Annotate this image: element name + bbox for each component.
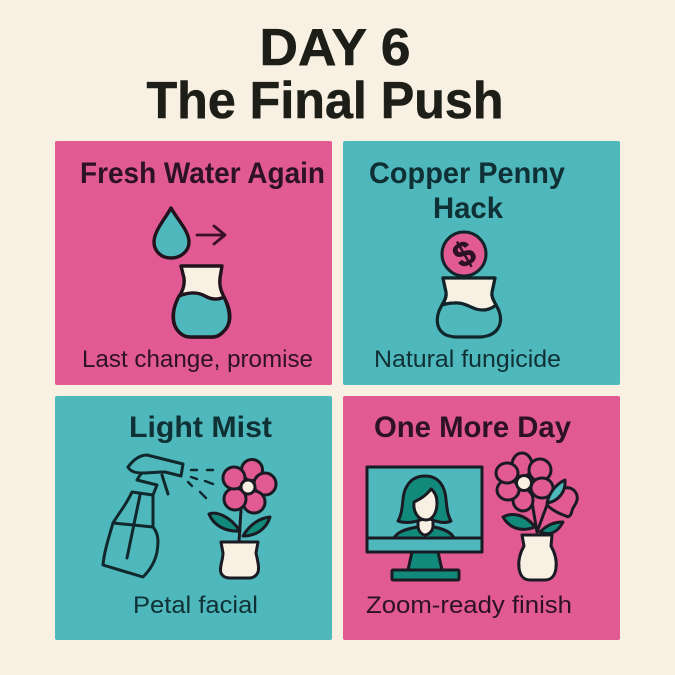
- icon: penny: $: [446, 233, 482, 276]
- panel: one more day: [343, 396, 620, 640]
- heading: copper penny hack: [369, 157, 566, 225]
- heading: light mist: Light Mist: [129, 411, 272, 444]
- icon: water drop: [154, 208, 189, 258]
- heading: copper penny hack: Copper Penny: [369, 157, 566, 190]
- icon: person on screen: [394, 476, 454, 538]
- icon: flower vase: [496, 453, 577, 580]
- caption: zoom-ready finish: Zoom-ready finish: [366, 592, 572, 619]
- caption: petal facial: Petal facial: [133, 592, 258, 619]
- icon: jar: [437, 278, 501, 337]
- panel: copper penny hack: [343, 141, 620, 385]
- icon: potted flower: [209, 460, 276, 578]
- heading: copper penny hack: Hack: [433, 192, 504, 225]
- caption: last change: Last change, promise: [82, 346, 313, 373]
- title: The Final Push: [146, 72, 504, 130]
- heading: fresh water again: Fresh Water Again: [80, 157, 325, 190]
- panel: light mist: [55, 396, 332, 640]
- icon: video call monitor: [367, 467, 482, 580]
- title: DAY 6: [260, 19, 410, 77]
- title: [146, 19, 504, 130]
- caption: natural fungicide: Natural fungicide: [374, 346, 561, 373]
- icon: mist droplets: [188, 470, 213, 498]
- panel: fresh water again: [55, 141, 332, 385]
- icon: spray bottle: [103, 455, 183, 577]
- icon: arrow: [197, 226, 225, 244]
- heading: one more day: One More Day: [374, 411, 572, 444]
- icon: glass of water: [173, 266, 230, 337]
